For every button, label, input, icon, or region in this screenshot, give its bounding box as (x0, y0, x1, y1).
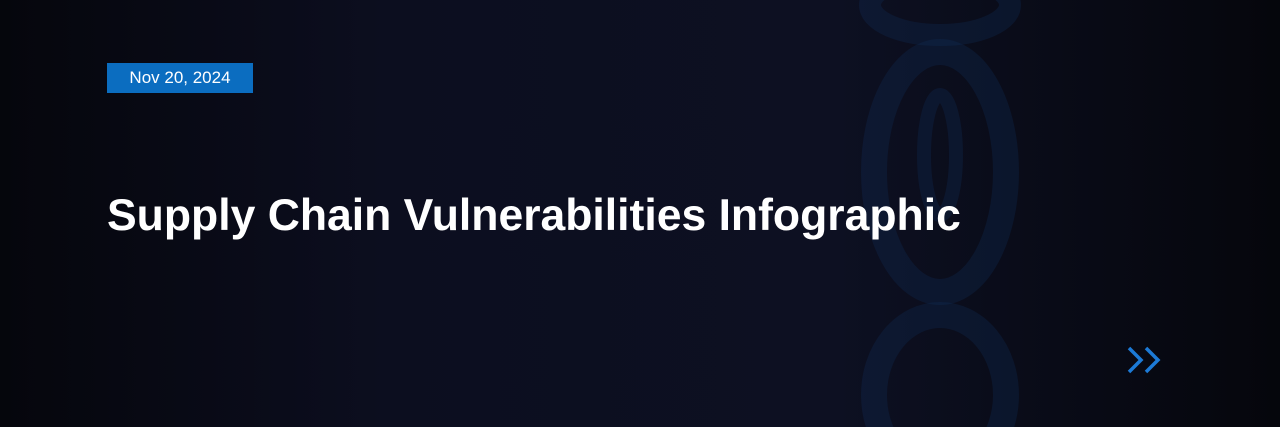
date badge: Nov 20, 2024 (129, 68, 231, 87)
date badge (107, 63, 253, 93)
icon: double chevron arrow (1128, 346, 1160, 374)
title: Supply Chain Vulnerabilities Infographic (107, 191, 961, 240)
